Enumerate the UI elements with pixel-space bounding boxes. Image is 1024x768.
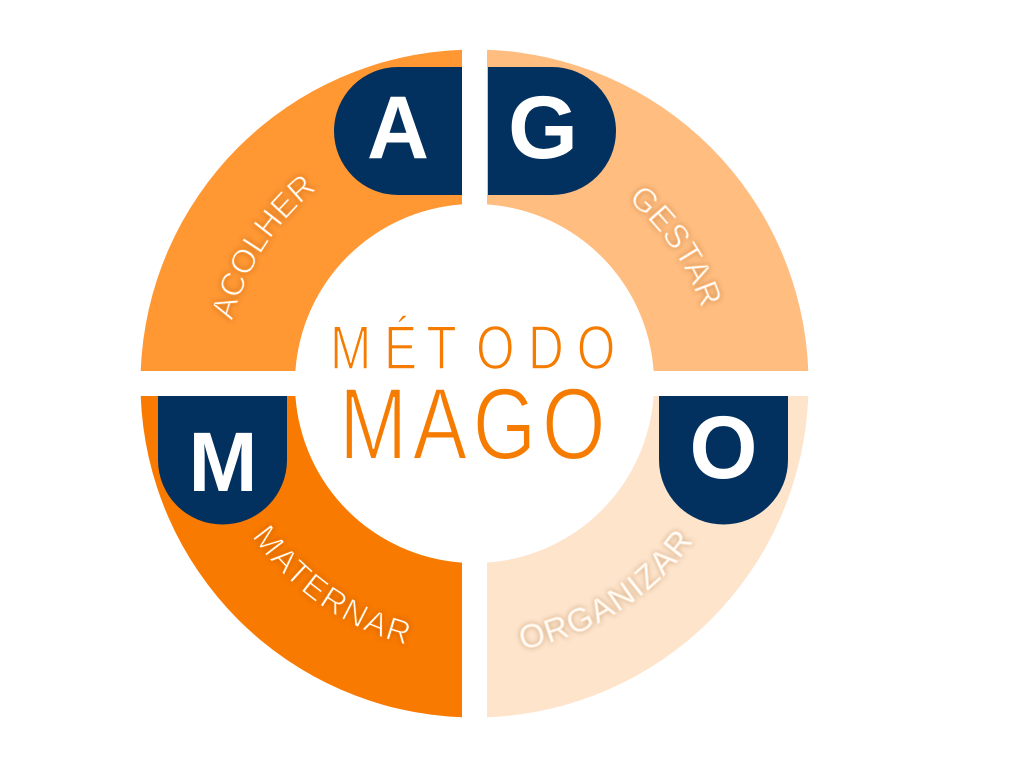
badge: G: G xyxy=(508,77,578,177)
title: Método MAGO: MAGO xyxy=(339,366,605,481)
panel: Organizar quadrant xyxy=(487,396,808,718)
label: ORGANIZAR: ORGANIZAR xyxy=(517,528,694,650)
title: Método MAGO: MÉTODO xyxy=(330,313,615,382)
badge: O: O xyxy=(690,397,758,497)
badge: A xyxy=(334,67,462,195)
label: ORGANIZAR: ORGANIZAR xyxy=(520,531,694,648)
label: ACOLHER: ACOLHER xyxy=(212,174,316,322)
panel: Maternar quadrant xyxy=(140,396,462,718)
label: ACOLHER: ACOLHER xyxy=(212,176,316,321)
badge: A: A xyxy=(367,77,429,177)
badge: M xyxy=(158,396,287,524)
badge: M: M xyxy=(188,415,258,509)
label: MATERNAR: MATERNAR xyxy=(253,524,412,645)
badge: O xyxy=(659,396,788,524)
panel: Gestar quadrant xyxy=(487,50,808,371)
badge: G xyxy=(488,67,616,195)
label: GESTAR: GESTAR xyxy=(632,188,720,307)
title: Método MAGO xyxy=(330,313,615,481)
label: GESTAR: GESTAR xyxy=(630,186,722,308)
panel: Acolher quadrant xyxy=(140,50,462,371)
label: MATERNAR: MATERNAR xyxy=(252,524,410,644)
